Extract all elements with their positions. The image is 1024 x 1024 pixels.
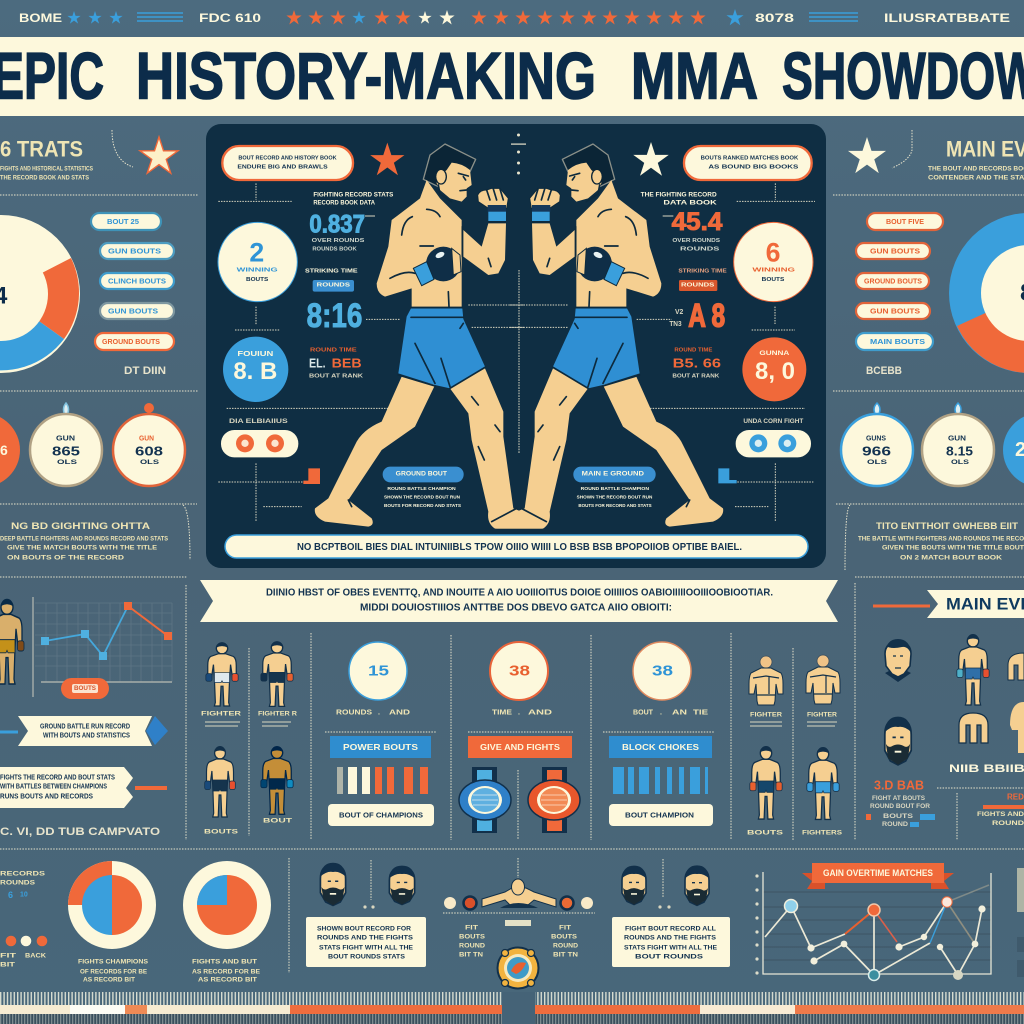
medallion: right blue ring: GUNS [866,436,886,442]
stat: A 8: STRIKING TIME [678,269,727,275]
note box: left [328,804,434,826]
status dots [6,936,47,946]
section: fighter roster left [201,641,297,836]
text block: bottom left: RECORDS [0,870,46,878]
blue note: right: BOUTS FOR RECORD AND STATS [578,503,652,509]
footer note pill: NO BCPTBOIL BIES DIAL INTUINIIBLS TPOW OIIIO WIIII LO BSB BSB BPOPOIIOB OPTIBE BAIEL. [297,541,742,553]
blue note: left: GROUND BOUT [396,471,447,477]
stat: 0.837: 0.837 [309,210,365,238]
top strip: FDC 610 [199,11,261,25]
blue numbers: 6 [8,890,13,900]
stat: small left: BOUT AT RANK [309,374,363,380]
text block: dots caption [0,952,46,968]
stripes: mixed [337,767,428,794]
text block: left footnote: ON BOUTS OF THE RECORD [7,554,124,562]
stats: main right: ROUND [992,821,1024,827]
medallion: right tan ring: OLS [951,460,969,466]
center cross marker [511,134,526,174]
circle stat: 8, 0 [742,337,806,401]
note box: bottom right [612,917,730,967]
caption: donut 2 [192,958,261,984]
blue numbers [8,890,28,900]
stat text right: ROUND [553,942,578,950]
panel: left stats column [0,130,198,562]
label: right legend note: BCEBB [866,365,902,377]
banner: center ribbon [200,580,838,622]
note box: bottom left: BOUT ROUNDS STATS [328,954,405,960]
legend pills: left: GUN BOUTS [108,306,158,316]
banner: center ribbon: DIINIO HBST OF OBES EVENTTQ, AND INOUITE A AIO UOIIIOITUS DOIOE OIIIIIOS OABIOIIIIIOOIIIOOBIOOTIAR. [266,588,773,598]
stat: 45.4: THE FIGHTING RECORD [641,193,717,199]
stat: small left: EL. [309,356,326,370]
label: center [505,920,531,926]
stat: small left: BEB [332,356,362,370]
roster labels: BOUT [263,818,292,824]
text block: left intro: FIGHTS AND HISTORICAL STATISTICS [0,166,94,172]
roster labels right: FIGHTERS [802,830,843,836]
counter: 38 blue: 38 [652,662,673,680]
stripes: blue [613,767,708,794]
top strip: BOME [19,11,62,25]
circle stat: 6: 6 [766,238,780,268]
corner marker: orange [303,468,320,484]
text block: dots caption: FIT [0,952,16,960]
note box: bottom right: STATS FIGHT WITH ALL THE [624,944,717,952]
legend pills: right: BOUT FIVE [886,217,924,226]
legend pills: left: GROUND BOUTS [102,337,160,346]
label: counter 38 blue: BOUT [633,710,654,716]
caption: donut 1 [78,958,149,984]
medallion: left orange ring: 608 [135,444,163,458]
label: counter 15: ROUNDS [336,710,372,716]
callout pill: left: BOUT RECORD AND HISTORY BOOK [238,155,337,161]
blue note: right: MAIN E GROUND [582,471,645,477]
label: counter 15 [336,710,410,716]
legend pills: right [856,213,943,350]
stat text right: BOUTS [551,934,578,940]
stats: main left: ROUND BOUT FOR [870,804,931,810]
text block: bottom left [0,870,46,886]
bar: orange header: GIVE AND FIGHTS [480,742,560,752]
chart ribbon [802,863,954,889]
caption: donut 2: AS RECORD BIT [198,976,257,984]
panel: right stats column [833,130,1024,570]
roster labels: FIGHTER R [258,710,297,718]
medallion: blue [1003,413,1024,487]
left stats group [218,143,525,522]
stat: small left: ROUND TIME [310,348,357,354]
legend pills: right: GUN BOUTS [870,246,920,256]
ribbon note with arrows: GROUND BATTLE RUN RECORD [40,724,130,730]
stat: A 8 [669,269,727,333]
stat: small right: ROUND TIME [674,348,713,354]
circle stat: 8, 0: GUNNA [759,350,790,357]
stat: 8:16 [305,269,362,335]
section: bout counters right [609,642,713,826]
title banner [0,37,1024,116]
side strip: right edge [1017,868,1024,977]
stat: 45.4: ROUNDS [680,246,720,252]
stat text left: ROUND [459,942,485,950]
title banner: HISTORY-MAKING [136,38,596,112]
stat: A 8: TN3 [669,319,682,328]
top strip: 8078 [755,11,794,25]
stat text right: FIT [559,924,571,932]
stat: 45.4: OVER ROUNDS [672,238,721,244]
icon: face 3 [622,866,646,904]
icon: blue belt [459,767,511,833]
torso: partial edge upper [1008,653,1024,680]
medallion: right tan ring: 8.15 [946,444,973,458]
caption: donut 2: FIGHTS AND BUT [192,958,257,966]
text block: right footnote: TITO ENTTHOIT GWHEBB EIIT [876,521,1019,531]
circle stat: 6 [734,222,813,302]
top strip: ILIUSRATBBATE [884,11,1010,25]
blue note: right [573,467,656,509]
bar: blue header right: BLOCK CHOKES [622,742,699,752]
circle stat: 8. B [223,337,288,402]
ribbon note with arrow: RUNS BOUTS AND RECORDS [0,794,93,800]
icon: face 4 [685,865,709,905]
text block: right intro: CONTENDER AND THE STATS [928,174,1024,182]
medallion: left tan: OLS [57,460,77,466]
text block: left footnote [0,521,169,562]
icons: left gloves pill [221,418,298,457]
torso: partial edge lower [1010,702,1024,753]
text block: right intro [928,166,1024,182]
chart: right donut [949,213,1024,373]
stat: small left [309,348,363,380]
banner: center ribbon: MIDDI DOUIOSTIIIOS ANTTBE DOS DBEVO GATCA AIIO OBIOITI: [360,602,672,614]
roster labels [201,710,297,836]
legend pills: right: GROUND BOUTS [864,276,922,286]
note box: bottom left [306,917,426,967]
ribbon note with arrows [0,716,168,746]
legend pills: left: CLINCH BOUTS [108,276,166,286]
legend pills: left: GUN BOUTS [108,246,161,256]
legend pills: right: MAIN BOUTS [870,337,925,346]
section: bout counters left [328,642,434,826]
right stats group [510,142,815,522]
legend pills: left: BOUT 25 [107,217,139,226]
stats: main right: FIGHTS AND [977,812,1024,818]
icon: cream star [633,142,669,176]
icon: head bearded [885,717,911,765]
bar: blue header: POWER BOUTS [343,742,418,752]
medallion: right tan ring [922,403,994,486]
bar: blue header [330,736,431,758]
section: main event right [866,590,1024,828]
counter: 15 [349,642,407,700]
medallion: left orange ring: GUN [139,436,154,442]
label: counter 38 blue: AN [672,710,687,716]
icon: face 1 [320,863,346,905]
chart: left donut [0,215,80,373]
torso: right [806,655,840,704]
chart: donut 1 [68,861,156,949]
fighter: main event [957,634,989,705]
medallion: right blue ring: OLS [867,460,887,466]
stat: 8:16: 8:16 [307,297,362,335]
medallion: orange: 6 [0,442,8,458]
medallion: right blue ring: 966 [862,444,891,458]
section: fighter roster right [747,655,843,836]
label: counter 38 blue: TIE [693,710,708,716]
label: counter 15: . [378,710,380,716]
note box: bottom left: ROUNDS AND THE FIGHTS [317,934,414,942]
circle stat: 8, 0: 8, 0 [755,358,795,385]
circle stat: 2: 2 [249,238,264,268]
stats: main left: BOUTS [883,814,913,820]
icon: orange belt [528,767,580,833]
stats: main right [977,792,1024,827]
ribbon note with arrow [0,767,167,808]
stat: 8:16: STRIKING TIME [305,269,358,275]
stat: 45.4 [641,193,722,252]
caption: main: NIIB BBIIBI [949,763,1024,775]
stat: A 8: V2 [675,307,683,316]
blue note: left: SHOWN THE RECORD BOUT RUN [384,494,460,500]
stats: main left: ROUND [882,822,909,828]
fighter: lower right [807,747,839,819]
caption: donut 1: OF RECORDS FOR BE [80,968,148,976]
medallion: right tan ring: GUN [948,436,966,442]
roster labels right: FIGHTER [750,712,782,718]
section: bottom faces right [612,865,730,967]
fighter: left [315,144,544,529]
legend pills: left [91,213,174,350]
label: counter 38 blue [633,710,708,716]
medallion: orange [0,413,20,487]
arrow: orange [873,604,930,608]
label: counter 38 [492,710,552,716]
section: belts center [459,642,580,833]
bar: blue header right [609,736,712,758]
icon: head top [885,639,911,682]
medallion: left tan [30,403,102,486]
stat text left: BIT TN [459,952,483,958]
roster labels: BOUTS [204,828,239,836]
label: counter 38: TIME [492,710,512,716]
medallion: left orange ring [113,403,185,486]
blue note: right: SHOWN THE RECORD BOUT RUN [577,494,653,500]
label: left legend note: DT DIIN [124,365,166,377]
fighter: top left [206,642,238,706]
fighter: left small [0,599,24,684]
text block: right footnote: ON 2 MATCH BOUT BOOK [900,554,1002,562]
footer barcode strip [0,992,1024,1024]
caption: left bottom: C. VI, DD TUB CAMPVATO [0,826,161,838]
text block: right footnote [858,521,1024,562]
label: counter 38: AND [528,710,552,716]
blue numbers: 10 [20,892,28,898]
caption: donut 1: AS RECORD BIT [83,976,135,984]
medallion: left tan: GUN [56,436,75,442]
icons: right gloves pill: UNDA CORN FIGHT [743,418,803,425]
circle stat: 8. B: 8. B [233,358,277,385]
circle stat: 8. B: FOUIUN [237,349,273,358]
callout pill: left [222,146,353,180]
top strip [19,9,1010,25]
torso: left [749,656,783,705]
caption: donut 1: FIGHTS CHAMPIONS [78,958,149,966]
stat: 45.4: 45.4 [672,208,722,236]
text block: dots caption: BACK [25,952,46,960]
callout pill: right [684,146,812,180]
counter: 15: 15 [368,662,389,680]
circle stat: 2: BOUTS [246,277,269,283]
fighter: top right [261,641,293,706]
stat: A 8: A 8 [688,297,725,333]
note box: bottom right: ROUNDS AND THE FIGHTS [624,934,716,942]
text block: left intro [0,166,94,182]
text block: left footnote: GIVE THE MATCH BOUTS WITH THE TITLE [7,544,158,552]
stat text right: BIT TN [553,952,578,958]
legend pills: right: GUN BOUTS [870,306,920,316]
counter: 38 orange [490,642,548,700]
stat: 0.837 [309,193,393,252]
icons: left gloves pill: DIA ELBIAIIUS [229,418,288,425]
counter: 38 orange: 38 [509,662,530,680]
section: left performance chart [0,597,172,838]
gloves row [444,896,593,910]
chart ribbon: GAIN OVERTIME MATCHES [823,868,933,878]
section: bottom faces left [306,863,426,967]
ribbon note with arrows: WITH BOUTS AND STATISTICS [43,732,130,740]
stat text left: BOUTS [459,934,486,940]
bar: orange header [468,736,572,758]
note box: bottom left: SHOWN BOUT RECORD FOR [317,926,411,932]
stat: 8:16: ROUNDS [317,283,351,289]
caption: donut 2: AS RECORD FOR BE [192,968,261,976]
icon: left star [140,137,178,173]
text block: bottom left: ROUNDS [0,880,36,886]
stat: 0.837: OVER ROUNDS [312,238,365,244]
label: counter 15: AND [389,710,410,716]
figure: spread arms [482,879,556,908]
dots [363,905,375,909]
note box: left: BOUT OF CHAMPIONS [339,810,423,820]
roster labels right: BOUTS [747,830,784,836]
stat: small right: BOUT AT RANK [672,374,719,380]
stat: small right [672,348,721,380]
corner marker: blue [718,468,737,483]
medallion: left tan: 865 [52,444,80,458]
icons: right gloves pill [736,418,811,457]
line chart: left [33,597,172,699]
title banner: MMA [631,38,758,112]
stat text right [551,924,578,958]
fighter: lower left [750,746,782,819]
torso: arch left [959,713,988,743]
label: counter 38 blue: . [660,710,662,716]
note box: bottom left: STATS FIGHT WITH ALL THE [319,944,413,952]
chart: donut 2 [183,861,271,949]
note box: bottom right: BOUT ROUNDS [635,954,704,960]
section: bottom left stats [0,861,271,984]
fighter: right [494,144,723,529]
text block: left intro: THE RECORD BOOK AND STATS [0,174,90,182]
stats: main right: RED [1007,792,1024,802]
callout pill: right: BOUTS RANKED MATCHES BOOK [701,155,798,161]
circle stat: 6: WINNING [752,268,795,274]
stats: main left: 3.D BAB [874,778,924,792]
footer note pill [225,535,808,558]
stat: 45.4: DATA BOOK [663,200,718,206]
medal and strap [498,948,538,1024]
stats: main left: FIGHT AT BOUTS [872,796,925,802]
stat: small right: B5. 66 [673,356,721,370]
medallion: right blue ring [841,403,913,486]
stat text left: FIT [465,924,478,932]
circle stat: 2 [218,222,297,302]
fighter: bottom left [205,746,235,817]
stat text left [459,924,486,958]
callout pill: left: ENDURE BIG AND BRAWLS [237,165,328,171]
stats: main left [866,778,935,828]
stat: 0.837: FIGHTING RECORD STATS [313,193,393,199]
blue note: left: BOUTS FOR RECORD AND STATS [384,503,462,509]
callout pill: right: AS BOUND BIG BOOKS [708,165,799,171]
icon: face 2 [389,866,415,904]
label: counter 38: . [518,710,520,716]
text block: left footnote: DEEP BATTLE FIGHTERS AND ROUNDS RECORD AND STATS [0,536,169,542]
fighter: bottom right dark skin [261,746,293,814]
stat: A 8: ROUNDS [681,283,715,289]
blue note: left [383,467,464,509]
heading: left traits: 6 TRATS [0,136,83,162]
note box: bottom right: FIGHT BOUT RECORD ALL [625,926,716,932]
icon: right star [848,137,886,173]
dots right [658,905,671,909]
counter: 38 blue [633,642,691,700]
note box: right [609,804,713,826]
note box: right: BOUT CHAMPION [625,810,694,820]
ribbon note with arrow: WITH BATTLES BETWEEN CHAMPIONS [0,784,107,790]
ribbon: main event [927,590,1024,618]
panel: central matchup [206,124,826,568]
circle stat: 2: WINNING [237,268,278,274]
medallion: left orange ring: OLS [140,460,159,466]
chart: bottom right line chart [755,863,991,980]
circle stat: 6: BOUTS [762,277,785,283]
roster labels right: FIGHTER [807,712,837,718]
text block: right footnote: GIVEN THE BOUTS WITH THE TITLE BOUT [882,544,1024,552]
base dotted line [443,912,595,914]
roster labels right [747,712,843,836]
icon: orange star [370,143,404,175]
blue note: left: ROUND BATTLE CHAMPION [387,486,456,492]
stat: 0.837: RECORD BOOK DATA [313,200,376,206]
roster labels: FIGHTER [201,710,241,718]
text block: left footnote: NG BD GIGHTING OHTTA [11,521,151,531]
blue note: right: ROUND BATTLE CHAMPION [581,486,649,492]
stat: 0.837: ROUNDS BOOK [312,246,357,252]
section: center lying fighter [443,879,595,958]
line chart: left: BOUTS [74,685,97,692]
ribbon note with arrow: FIGHTS THE RECORD AND BOUT STATS [0,774,115,782]
text block: dots caption: BIT [0,962,15,968]
